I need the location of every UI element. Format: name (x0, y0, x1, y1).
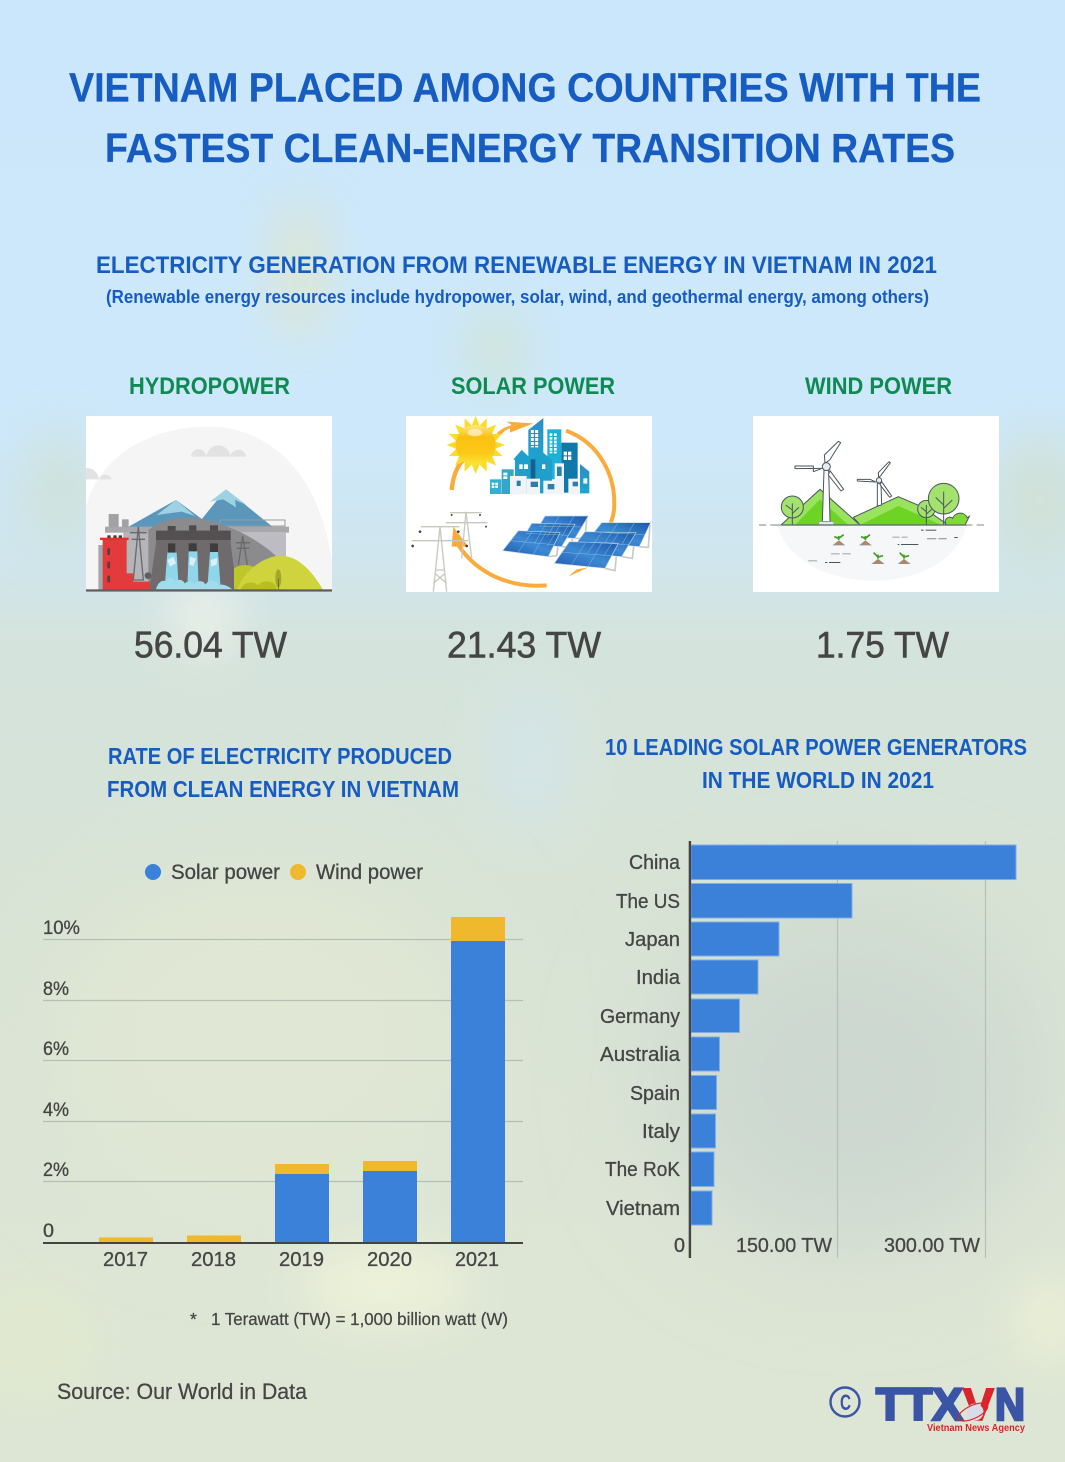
icon: wind turbines (753, 416, 999, 592)
heading: wind power: WIND POWER (805, 373, 952, 400)
heading: solar power: SOLAR POWER (451, 373, 615, 400)
bar chart: clean energy rate: 2018 (191, 1249, 236, 1271)
bar chart: leading solar generators: Vietnam (606, 1198, 680, 1220)
bar chart: clean energy rate: 4% (43, 1099, 69, 1121)
logo: TTXVN: N (995, 1379, 1025, 1430)
section heading: renewable generation: ELECTRICITY GENERATION FROM RENEWABLE ENERGY IN VIETNAM IN 2021 (96, 252, 937, 279)
bar chart: leading solar generators: India (636, 967, 681, 989)
icon: solar cycle (406, 416, 652, 592)
section heading: renewable generation (96, 252, 937, 307)
heading: rate chart (107, 743, 459, 802)
logo: TTXVN: C (840, 1390, 851, 1415)
bar chart: leading solar generators: China (629, 852, 681, 874)
heading: leading generators chart (605, 734, 1027, 793)
footnote: * (190, 1309, 197, 1329)
bar chart: clean energy rate: 2017 (103, 1249, 148, 1271)
bar chart: leading solar generators: Italy (642, 1121, 680, 1143)
bar chart: leading solar generators (600, 841, 1016, 1258)
bar chart: clean energy rate: 2021 (455, 1249, 499, 1271)
heading: leading generators chart: IN THE WORLD IN 2021 (702, 767, 934, 793)
value: solar power: 21.43 TW (447, 624, 601, 666)
bar chart: clean energy rate: 8% (43, 978, 69, 1000)
panel: wind power (753, 373, 999, 666)
legend (145, 860, 423, 884)
legend: Wind power (316, 860, 423, 884)
bar chart: clean energy rate: 2020 (367, 1249, 412, 1271)
panel: hydropower (86, 373, 332, 666)
value: wind power: 1.75 TW (816, 624, 949, 666)
logo: TTXVN: TTX (876, 1379, 963, 1430)
bar chart: leading solar generators: The RoK (605, 1159, 681, 1181)
logo: TTXVN (830, 1379, 1025, 1434)
legend: Solar power (171, 860, 280, 884)
bar chart: clean energy rate (43, 917, 523, 1271)
bar chart: clean energy rate: 2019 (279, 1249, 324, 1271)
icon: hydropower dam (86, 416, 332, 592)
source: Source: Our World in Data (57, 1379, 308, 1404)
bar chart: leading solar generators: 150.00 TW (736, 1235, 832, 1257)
logo: TTXVN: Vietnam News Agency (927, 1423, 1025, 1434)
bar chart: leading solar generators: Germany (600, 1006, 680, 1028)
footnote: 1 Terawatt (TW) = 1,000 billion watt (W) (211, 1309, 508, 1329)
value: hydropower: 56.04 TW (134, 624, 287, 666)
bar chart: leading solar generators: Australia (600, 1044, 681, 1066)
title (69, 64, 981, 171)
title: FASTEST CLEAN-ENERGY TRANSITION RATES (105, 125, 955, 171)
logo: TTXVN: V (963, 1379, 994, 1430)
bar chart: leading solar generators: Spain (630, 1083, 680, 1105)
heading: rate chart: FROM CLEAN ENERGY IN VIETNAM (107, 776, 459, 802)
heading: rate chart: RATE OF ELECTRICITY PRODUCED (108, 743, 452, 769)
section heading: renewable generation: (Renewable energy resources include hydropower, solar, wind, and geothermal energy, among others) (106, 286, 929, 307)
bar chart: leading solar generators: 300.00 TW (884, 1235, 980, 1257)
title: VIETNAM PLACED AMONG COUNTRIES WITH THE (69, 64, 981, 110)
bar chart: leading solar generators: Japan (625, 929, 680, 951)
bar chart: clean energy rate: 0 (43, 1220, 54, 1242)
bar chart: clean energy rate: 10% (43, 917, 80, 939)
panel: solar power (406, 373, 652, 666)
bar chart: leading solar generators: The US (616, 891, 680, 913)
heading: hydropower: HYDROPOWER (129, 373, 290, 400)
bar chart: clean energy rate: 6% (43, 1038, 69, 1060)
bar chart: clean energy rate: 2% (43, 1159, 69, 1181)
bar chart: leading solar generators: 0 (674, 1235, 685, 1257)
